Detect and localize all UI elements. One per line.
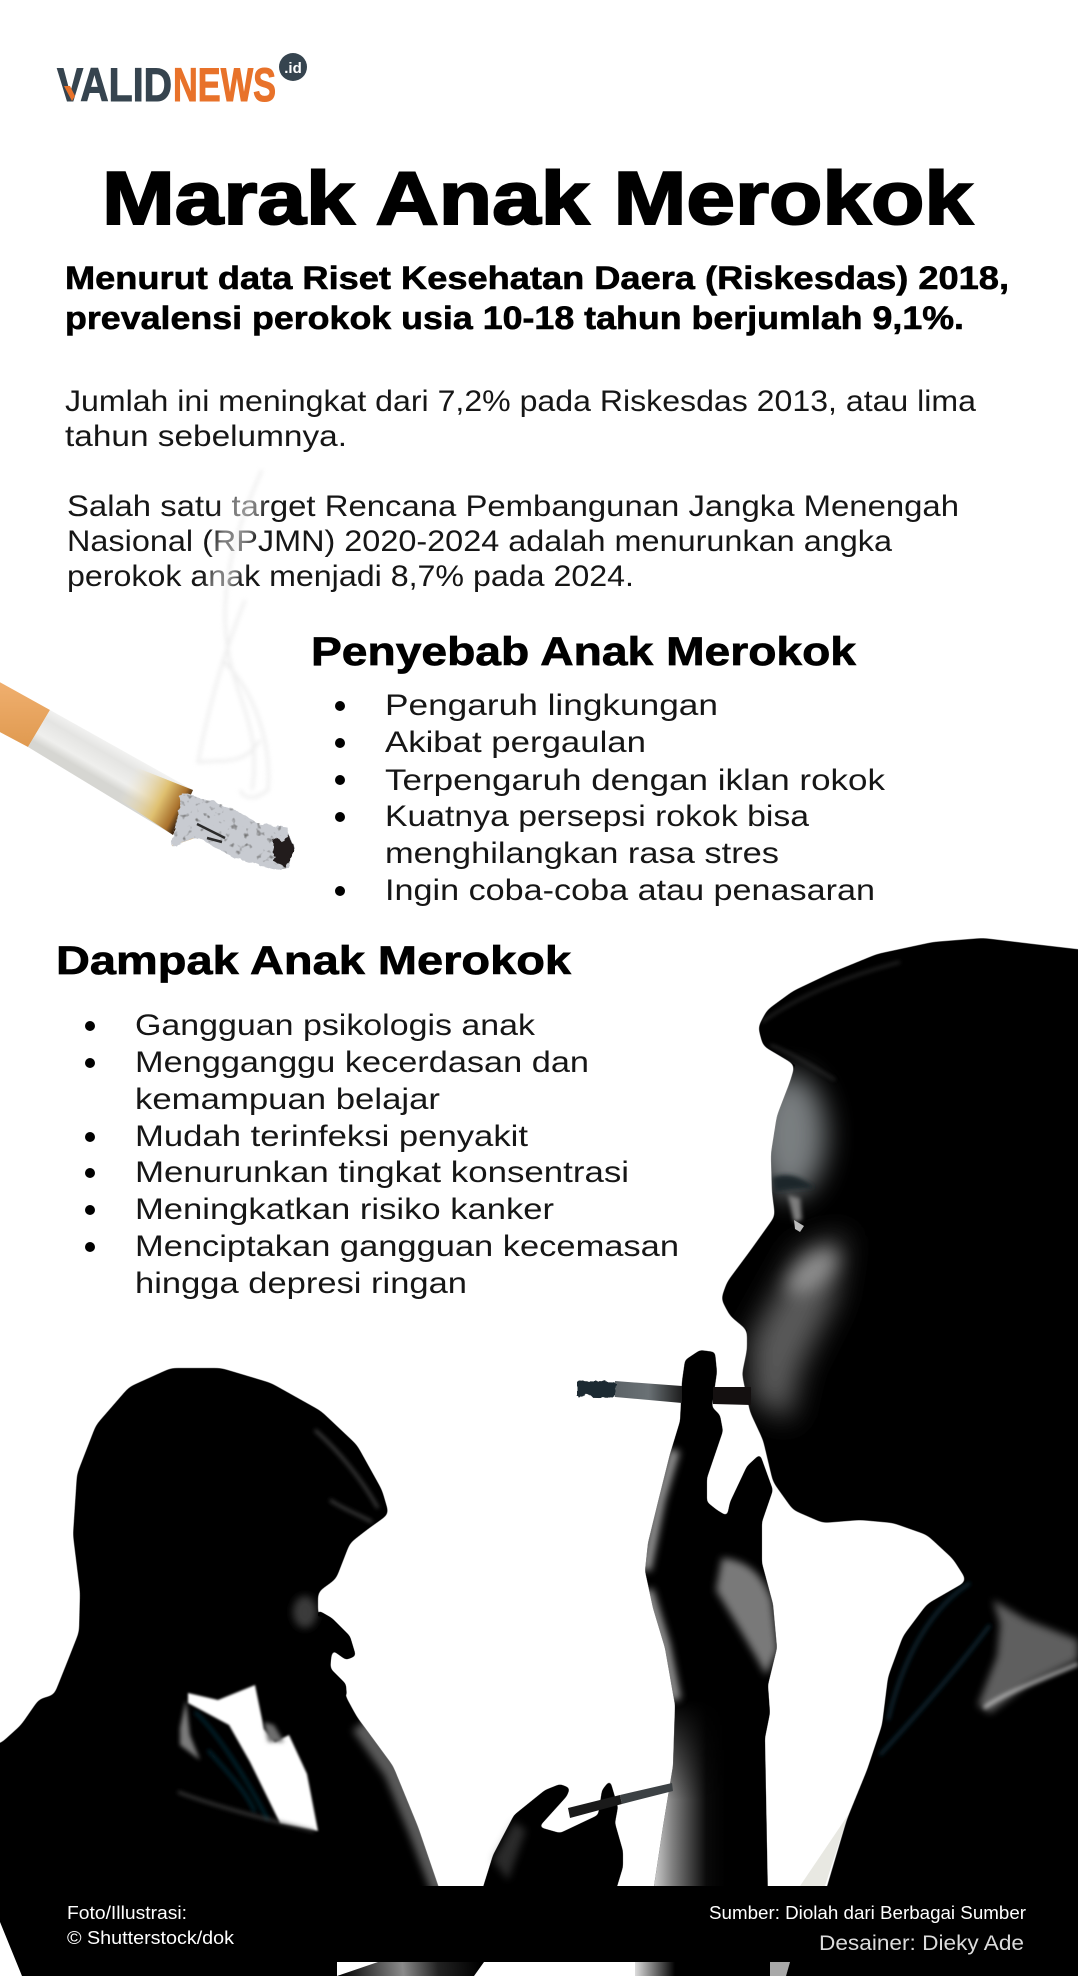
- heading: causes: Penyebab Anak Merokok: [311, 630, 857, 674]
- subtitle: Menurut data Riset Kesehatan Daera (Riskesdas) 2018,: [65, 260, 1009, 296]
- adult brow: [772, 1175, 815, 1192]
- silhouette: child: [0, 1368, 673, 1900]
- lower figures below footer: [0, 1962, 1078, 1976]
- credit: source: Sumber: Diolah dari Berbagai Sumber: [709, 1903, 1026, 1923]
- list: impacts: hingga depresi ringan: [135, 1267, 467, 1300]
- paragraph: target: Nasional (RPJMN) 2020-2024 adalah menurunkan angka: [67, 525, 892, 558]
- white corner wedge: [0, 1922, 22, 1976]
- adult neck highlights: [978, 1600, 1078, 1713]
- child shoulder line: [178, 1792, 314, 1831]
- logo: Validnews.id: VALID: [57, 58, 172, 111]
- paragraph: target: [67, 490, 959, 593]
- list: impacts: Menurunkan tingkat konsentrasi: [135, 1156, 629, 1189]
- child arm rim light: [360, 1725, 440, 1890]
- footer bar: [0, 1886, 1078, 1962]
- logo: Validnews.id: NEWS: [173, 58, 276, 111]
- list: impacts: kemampuan belajar: [135, 1083, 440, 1116]
- child cigarette: [568, 1783, 673, 1818]
- paragraph: target: perokok anak menjadi 8,7% pada 2024.: [67, 560, 634, 593]
- list: causes: Akibat pergaulan: [385, 726, 646, 759]
- list: causes: Pengaruh lingkungan: [385, 689, 718, 722]
- child hand: [479, 1780, 623, 1900]
- child neck light: [180, 1700, 200, 1760]
- list: impacts: Meningkatkan risiko kanker: [135, 1193, 554, 1226]
- paragraph: increase: tahun sebelumnya.: [65, 420, 347, 453]
- list: impacts: Menciptakan gangguan kecemasan: [135, 1230, 679, 1263]
- adult forehead light: [754, 1073, 826, 1197]
- subtitle: prevalensi perokok usia 10-18 tahun berjumlah 9,1%.: [65, 300, 964, 336]
- silhouette: adult smoking: [615, 938, 1078, 1900]
- adult cigarette: [615, 1381, 682, 1403]
- child face light: [293, 1596, 317, 1628]
- adult head, neck and torso: [721, 938, 1078, 1900]
- child gap under chin: [188, 1685, 318, 1831]
- smoke: [198, 470, 269, 798]
- adult smoking hand: [645, 1350, 777, 1900]
- adult shirt sheen: [880, 1583, 990, 1755]
- adult cigarette filter: [713, 1387, 751, 1405]
- adult hair highlights: [762, 962, 900, 1080]
- title: Marak Anak Merokok: [102, 156, 973, 240]
- credit: photo: Foto/Illustrasi:: [67, 1903, 187, 1923]
- paragraph: target: Salah satu target Rencana Pembangunan Jangka Menengah: [67, 490, 959, 523]
- child shirt sheen: [195, 1712, 268, 1820]
- paragraph: increase: Jumlah ini meningkat dari 7,2% pada Riskesdas 2013, atau lima: [65, 385, 976, 418]
- logo: Validnews.id: [57, 53, 307, 111]
- list: causes: menghilangkan rasa stres: [385, 837, 779, 870]
- list: impacts: [85, 1009, 679, 1300]
- credit: photo: [67, 1903, 235, 1948]
- list: causes: Ingin coba-coba atau penasaran: [385, 874, 875, 907]
- list: impacts: Mudah terinfeksi penyakit: [135, 1120, 529, 1153]
- list: causes: Kuatnya persepsi rokok bisa: [385, 800, 809, 833]
- adult hand lights: [640, 1450, 778, 1886]
- heading: impacts: Dampak Anak Merokok: [56, 939, 572, 983]
- adult eyelid: [788, 1195, 802, 1222]
- adult lit face, neck and shirt details: [750, 962, 1078, 1755]
- child body: [0, 1368, 443, 1900]
- adult neck bright edge: [984, 1664, 1078, 1708]
- adult cheek light: [780, 1242, 844, 1302]
- adult pale arm: [800, 1815, 848, 1886]
- child hair highlights: [315, 1430, 378, 1522]
- subtitle: [65, 260, 1009, 336]
- credit: photo: © Shutterstock/dok: [67, 1928, 235, 1948]
- list: impacts: Gangguan psikologis anak: [135, 1009, 536, 1042]
- adult wrist light: [654, 1708, 710, 1886]
- child lights: [178, 1430, 440, 1890]
- smoke veil over text: [205, 480, 262, 600]
- child finger tips: [310, 1610, 356, 1698]
- icon: burning cigarette: [0, 680, 300, 875]
- adult eye: [794, 1220, 804, 1232]
- adult cigarette ash: [577, 1381, 615, 1397]
- adult lower face light: [750, 1235, 845, 1420]
- adult palm light: [716, 1558, 778, 1675]
- credit: designer: Desainer: Dieky Ade: [819, 1932, 1024, 1955]
- child finger light: [264, 1722, 284, 1742]
- list: causes: Terpengaruh dengan iklan rokok: [385, 764, 886, 797]
- logo: Validnews.id: .id: [284, 60, 302, 77]
- list: causes: [335, 689, 886, 907]
- adult hand rim light: [646, 1450, 676, 1700]
- list: impacts: Mengganggu kecerdasan dan: [135, 1046, 589, 1079]
- child hand light: [493, 1822, 526, 1880]
- paragraph: increase: [65, 385, 976, 453]
